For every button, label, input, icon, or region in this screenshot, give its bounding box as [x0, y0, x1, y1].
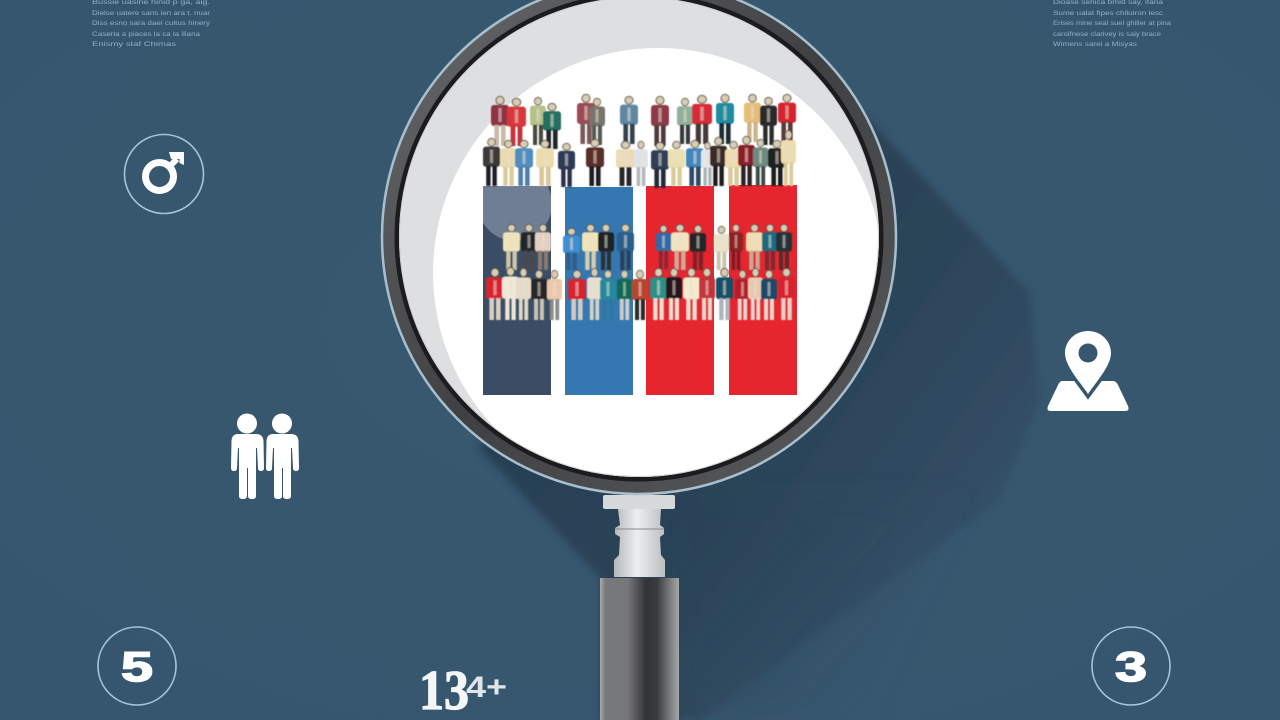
top-left caption text: Diss esno sara dael cultus hinery: [92, 20, 211, 27]
handle grip: [600, 578, 679, 720]
number badge: 3: [1092, 627, 1170, 705]
top-left caption text: [92, 0, 211, 48]
handle neck and collar: [603, 495, 675, 577]
lens highlight: [433, 48, 883, 498]
lens glass: [399, 0, 879, 477]
magnifier lens: [382, 0, 896, 498]
icon: two people: [231, 414, 299, 499]
bar: red right: [729, 185, 797, 395]
lens outer rim: [382, 0, 896, 494]
icon: male symbol in circle: [124, 134, 204, 214]
top-right caption text: Wimens sarei a Misyas: [1053, 41, 1138, 48]
number badge: 3: 3: [1115, 643, 1147, 690]
magnifier handle: [600, 495, 679, 720]
bar chart with four bars: [478, 167, 797, 395]
age label: [419, 660, 507, 720]
people row 2: [483, 130, 796, 188]
magnifier cast shadow: [478, 112, 1040, 720]
bar: red left: [646, 186, 714, 395]
top-left caption text: Caserla a piaces la ca la iliana: [92, 31, 200, 38]
bar highlight circle: [483, 186, 551, 240]
top-right caption text: Erises mine seal suel ghiller at pina: [1053, 20, 1171, 27]
people row 3: [503, 224, 792, 270]
number badge: 5: [98, 627, 176, 705]
age label: 4+: [466, 671, 507, 704]
top-right caption text: caroifnese clarivey is saiy brace: [1053, 31, 1161, 38]
bar: blue: [565, 187, 633, 395]
top-left caption text: Enismy staf Chimas: [92, 41, 177, 48]
people row 1: [491, 94, 796, 149]
top-left caption text: Dielse uatere sans ien ara t. nuar: [92, 10, 211, 17]
people row 4: [486, 267, 795, 320]
top-right caption text: [1053, 0, 1171, 48]
top-right caption text: Sume ualat fipes chiluiron lesc: [1053, 10, 1164, 17]
icon: location pin on map: [1047, 331, 1129, 411]
bar: dark navy: [483, 186, 551, 395]
number badge: 5: 5: [121, 643, 153, 690]
